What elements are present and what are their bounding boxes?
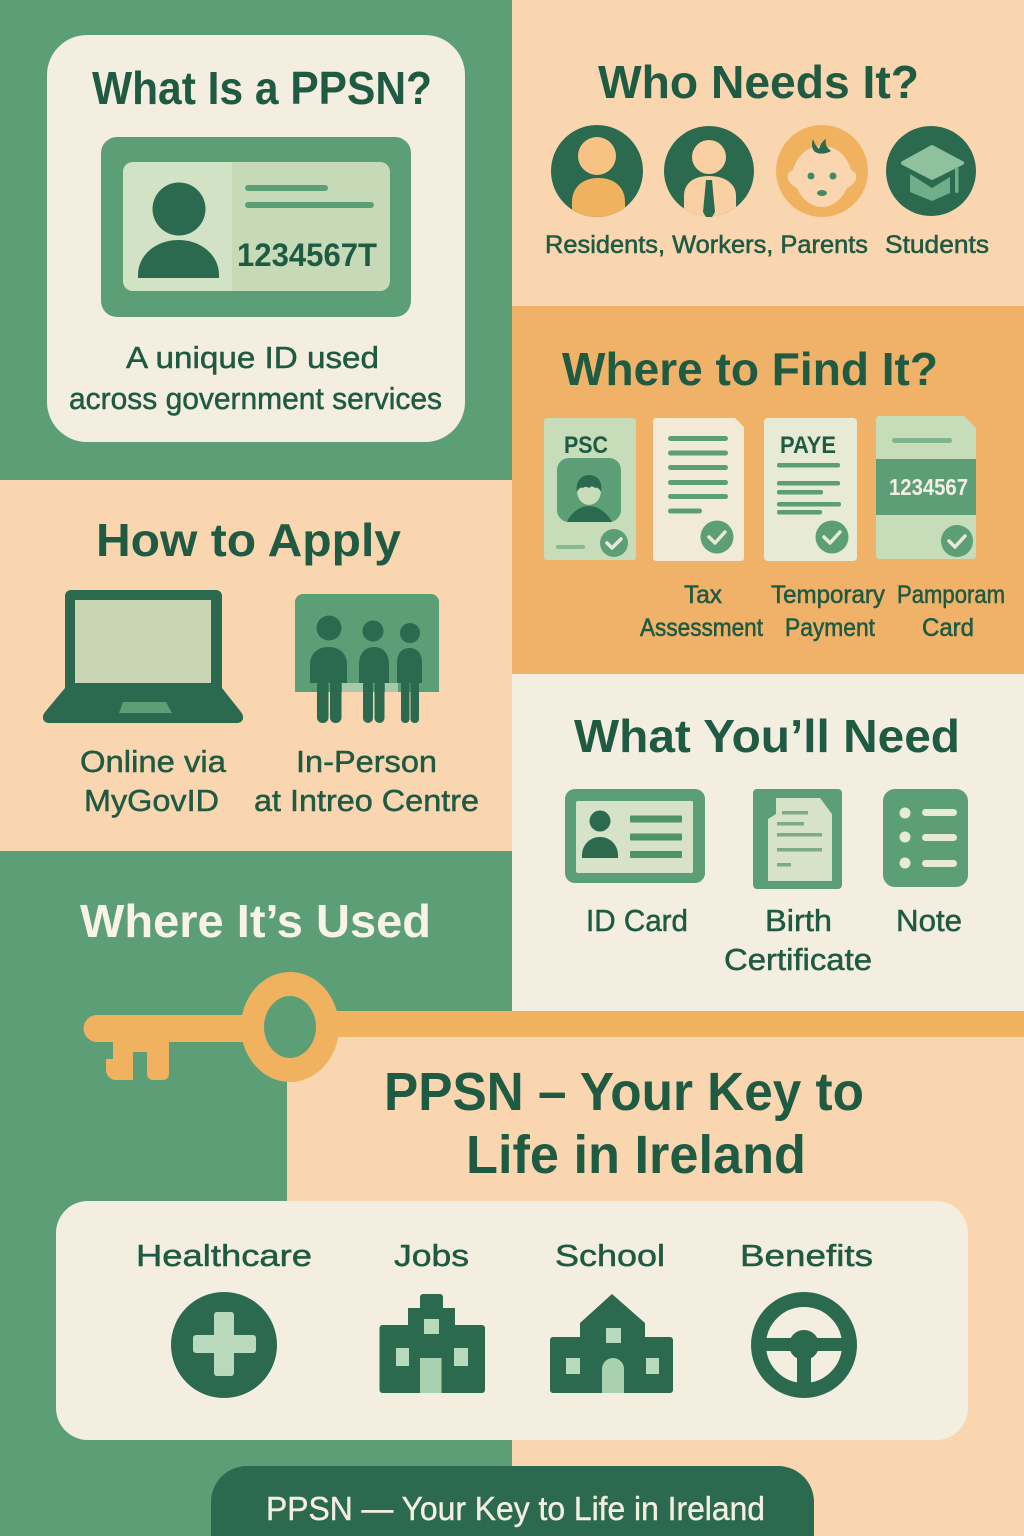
icon: ID card with number: 1234567T	[237, 237, 377, 273]
document: PSC card	[544, 418, 636, 560]
panel: what is a PPSN	[47, 35, 465, 442]
document: PAYE: PAYE	[780, 432, 836, 459]
label: temporary payment: Payment	[785, 614, 875, 642]
item: healthcare	[136, 1238, 312, 1398]
label: online	[80, 744, 227, 818]
text: PPSN description	[69, 340, 442, 416]
icon: student cap	[886, 126, 976, 216]
label: in person	[254, 744, 479, 818]
icon: laptop	[43, 590, 243, 723]
icon: ID card with number	[101, 137, 411, 317]
icon: worker	[664, 126, 754, 220]
panel: where to find it	[544, 343, 1005, 642]
label: tax assessment: Tax	[684, 581, 722, 609]
heading: PPSN your key to life in Ireland	[384, 1062, 864, 1185]
icon: people at Intreo Centre	[295, 594, 439, 723]
document: PSC card: PSC	[564, 432, 608, 459]
document: number card: 1234567	[889, 474, 968, 500]
labels: who needs it: Residents, Workers, Parents	[545, 231, 868, 259]
label: temporary payment	[771, 581, 885, 642]
icon: birth certificate	[753, 789, 842, 889]
heading: where it's used: Where It’s Used	[80, 895, 431, 947]
item: benefits: Benefits	[740, 1238, 873, 1273]
labels: what you'll need: Certificate	[724, 942, 872, 977]
item: school: School	[555, 1238, 665, 1273]
label: tax assessment	[640, 581, 763, 642]
panel: where it's used	[56, 1201, 968, 1440]
label: pamporam card	[897, 581, 1005, 642]
document: number card	[876, 416, 976, 559]
icon: baby	[776, 125, 868, 217]
heading: what you'll need: What You’ll Need	[574, 710, 960, 762]
label: in person: at Intreo Centre	[254, 783, 479, 818]
label: in person: In-Person	[296, 744, 437, 779]
panel: what you'll need	[565, 710, 968, 977]
labels: what you'll need	[586, 903, 962, 977]
heading: what is a PPSN: What Is a PPSN?	[92, 62, 432, 114]
labels: what you'll need: Birth	[765, 903, 832, 938]
labels: what you'll need: Note	[896, 903, 962, 938]
label: temporary payment: Temporary	[771, 581, 885, 609]
label: pamporam card: Pamporam	[897, 581, 1005, 609]
labels: who needs it: Students	[885, 231, 989, 259]
label: tax assessment: Assessment	[640, 614, 763, 642]
text: PPSN description: A unique ID used	[126, 340, 379, 375]
heading: who needs it: Who Needs It?	[598, 56, 919, 108]
label: pamporam card: Card	[922, 614, 974, 642]
item: jobs: Jobs	[394, 1238, 469, 1273]
text: PPSN description: across government services	[69, 381, 442, 416]
item: healthcare: Healthcare	[136, 1238, 312, 1273]
icon: ID card	[565, 789, 705, 883]
item: school	[550, 1238, 673, 1393]
item: jobs	[380, 1238, 485, 1393]
document: tax assessment	[653, 418, 744, 561]
label: online: MyGovID	[84, 783, 219, 818]
heading: where to find it: Where to Find It?	[562, 343, 938, 395]
heading: PPSN your key to life in Ireland: PPSN – Your Key to	[384, 1062, 864, 1122]
item: benefits	[740, 1238, 873, 1391]
labels: what you'll need: ID Card	[586, 903, 688, 938]
icon: note list	[883, 789, 968, 887]
panel: how to apply	[43, 514, 479, 818]
panel: who needs it	[545, 56, 989, 259]
heading: PPSN your key to life in Ireland: Life in Ireland	[466, 1125, 806, 1185]
heading: how to apply: How to Apply	[96, 514, 401, 566]
footer banner: PPSN — Your Key to Life in Ireland	[266, 1490, 765, 1527]
footer banner	[211, 1466, 814, 1536]
icon: key with long shaft	[84, 972, 1024, 1082]
icon: resident	[551, 125, 643, 220]
document: PAYE	[764, 418, 857, 561]
label: online: Online via	[80, 744, 227, 779]
